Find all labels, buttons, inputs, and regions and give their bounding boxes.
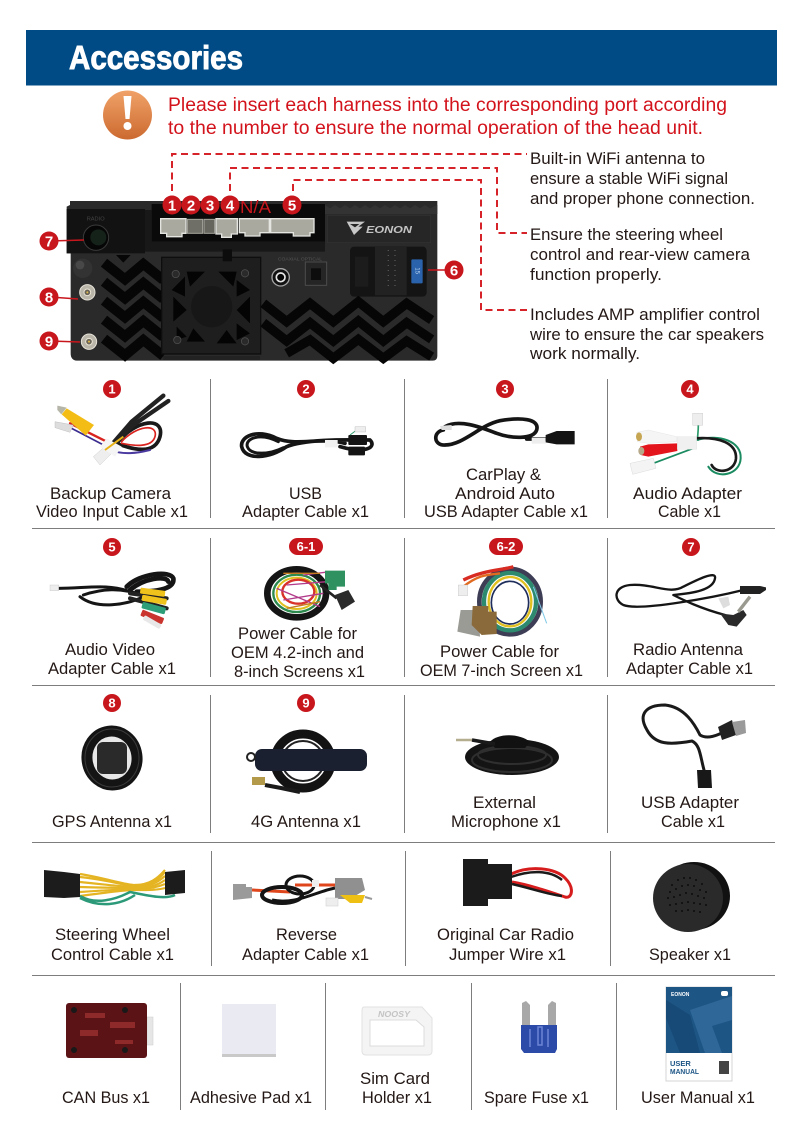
note: AMP control: work normally. [529, 345, 640, 363]
badge 2 [297, 380, 315, 398]
item: audio adapter cable [630, 380, 743, 521]
icon: jumper wire [463, 859, 571, 906]
item: jumper wire [437, 859, 574, 964]
port badges on device: N/A [240, 197, 271, 217]
item: power cable 6-2 [420, 538, 583, 680]
label: Sim Card [360, 1070, 430, 1088]
note: WiFi antenna: Built-in WiFi antenna to [530, 150, 705, 168]
radio port: RADIO [87, 217, 105, 223]
warning text: to the number to ensure the normal operation of the head unit. [168, 118, 703, 139]
label: USB Adapter [641, 794, 740, 812]
label: Jumper Wire x1 [449, 946, 566, 964]
label: Original Car Radio [437, 926, 574, 944]
label: Power Cable for [440, 643, 559, 661]
note: WiFi antenna: and proper phone connection. [530, 190, 755, 208]
logo plate [327, 215, 431, 243]
note: AMP control: wire to ensure the car speakers [529, 326, 764, 344]
label: CarPlay & [466, 466, 541, 484]
item: CAN bus [62, 1003, 153, 1107]
note: WiFi antenna [530, 150, 755, 208]
label [437, 926, 574, 964]
device rear panel photo: EONON [366, 225, 413, 236]
label: Reverse [276, 926, 337, 944]
port badges on device: 6 [450, 262, 458, 280]
note: AMP control [529, 306, 764, 363]
item: adhesive pad [190, 1004, 312, 1107]
label: Cable x1 [658, 503, 721, 521]
label [36, 485, 188, 521]
label: Android Auto [455, 485, 555, 503]
item: audio video cable [48, 538, 176, 678]
icon: fuse [521, 1001, 557, 1053]
connector block [161, 219, 314, 237]
icon: SIM holder: NOOSY [378, 1010, 411, 1019]
badge 1: 1 [108, 382, 116, 396]
label [242, 926, 369, 964]
label: Steering Wheel [55, 926, 170, 944]
label: Speaker x1 [649, 946, 731, 964]
label: CAN Bus x1 [62, 1089, 150, 1107]
item: CarPlay USB cable [424, 380, 588, 521]
coax and optical ports: COAXIAL OPTICAL [278, 257, 322, 263]
note: steering wheel control: function properly. [530, 266, 662, 284]
icon: GPS antenna [83, 728, 141, 788]
note: steering wheel control: Ensure the steering wheel [530, 226, 723, 244]
label: USB [289, 485, 322, 503]
icon: audio adapter cable [630, 413, 741, 474]
label: Radio Antenna [633, 641, 744, 659]
badge 5: 5 [108, 540, 116, 554]
port badges on device: 5 [288, 198, 296, 214]
icon: reverse adapter cable [233, 876, 372, 906]
badge 3: 3 [501, 382, 509, 396]
item: GPS antenna [52, 694, 172, 831]
label: Audio Video [65, 641, 155, 659]
label [641, 794, 740, 831]
item: USB adapter cable [242, 380, 372, 521]
icon: user manual: MANUAL [670, 1067, 699, 1076]
icon: AV cable [50, 574, 173, 629]
icon: CAN bus box [66, 1003, 153, 1058]
port badges on device: 8 [45, 290, 53, 306]
item: power cable 6-1 [231, 538, 365, 681]
note: steering wheel control [530, 226, 751, 284]
item: backup camera cable [36, 380, 188, 521]
port badges on device: 2 [187, 198, 195, 214]
label: Adapter Cable x1 [626, 660, 753, 678]
item: USB adapter [641, 705, 746, 831]
icon: microphone [456, 735, 559, 775]
item: user manual [641, 987, 755, 1107]
icon: user manual: EONON [671, 992, 690, 998]
note: AMP control: Includes AMP amplifier control [530, 306, 760, 324]
label [51, 926, 174, 964]
fuse [411, 259, 423, 283]
label: OEM 4.2-inch and [231, 644, 364, 662]
badge 4 [681, 380, 699, 398]
label: External [473, 794, 536, 812]
badge 7 [682, 538, 700, 556]
icon: power cable harness [457, 567, 547, 637]
label: Adhesive Pad x1 [190, 1089, 312, 1107]
badge 9: 9 [302, 696, 310, 710]
SMA connectors [80, 285, 95, 300]
icon: CarPlay cable [436, 419, 575, 445]
label [360, 1070, 432, 1107]
icon: USB adapter [643, 705, 746, 788]
label: Power Cable for [238, 625, 357, 643]
label: Audio Adapter [633, 485, 743, 503]
item: external microphone [451, 735, 561, 831]
label: Backup Camera [50, 485, 172, 503]
label [424, 466, 588, 521]
icon: USB cable [242, 427, 372, 456]
port badges on device: 9 [45, 334, 53, 350]
port badges on device: 1 [168, 198, 176, 214]
badge 4: 4 [686, 382, 694, 396]
label: Control Cable x1 [51, 946, 174, 964]
icon: power cable harness [267, 569, 355, 617]
label [626, 641, 753, 678]
item: 4G antenna [247, 694, 367, 831]
device rear panel photo [67, 201, 437, 361]
label: Adapter Cable x1 [242, 946, 369, 964]
badge 7: 7 [687, 540, 695, 554]
item: speaker [649, 862, 731, 964]
header banner [26, 30, 777, 86]
label [633, 485, 743, 521]
badge 6-1: 6-1 [297, 539, 315, 554]
note: WiFi antenna: ensure a stable WiFi signal [530, 170, 728, 188]
label [451, 794, 561, 831]
badge 8: 8 [108, 696, 116, 710]
port badges on device: 7 [45, 234, 53, 250]
port badges on device: 4 [226, 198, 235, 214]
icon: radio antenna cable [617, 575, 766, 627]
label: 8-inch Screens x1 [234, 663, 365, 681]
title: Accessories [69, 39, 243, 76]
label: USB Adapter Cable x1 [424, 503, 588, 521]
right connector [350, 247, 427, 297]
label: Adapter Cable x1 [242, 503, 369, 521]
icon: speaker [653, 862, 730, 932]
item: reverse adapter cable [233, 876, 372, 964]
icon: backup camera cable [55, 396, 168, 465]
label: 4G Antenna x1 [251, 813, 361, 831]
dashed leader lines [172, 154, 527, 310]
warning text: Please insert each harness into the corresponding port according [168, 95, 727, 116]
icon: 4G antenna [247, 734, 367, 792]
badge 6-2: 6-2 [497, 539, 515, 554]
badge 2: 2 [302, 382, 310, 396]
port badges on device: 3 [206, 198, 214, 214]
icon: user manual: USER [670, 1059, 691, 1068]
label: Cable x1 [661, 813, 725, 831]
dome button [73, 259, 92, 278]
label: GPS Antenna x1 [52, 813, 172, 831]
device rear panel photo: 15 [414, 267, 420, 275]
grid dividers [32, 379, 775, 1110]
item: radio antenna cable [617, 538, 766, 678]
label: User Manual x1 [641, 1089, 755, 1107]
icon: warning exclamation [103, 90, 152, 140]
icon: steering wheel cable [44, 870, 185, 904]
label [420, 643, 583, 680]
warning text [168, 95, 727, 139]
fan panel [162, 257, 261, 354]
icon: adhesive pad [222, 1004, 276, 1057]
label [231, 625, 365, 681]
label: Video Input Cable x1 [36, 503, 188, 521]
right vent chevrons [263, 302, 432, 358]
badge 6-2 [489, 538, 523, 555]
badge 3 [496, 380, 514, 398]
badge 1 [103, 380, 121, 398]
label: OEM 7-inch Screen x1 [420, 662, 583, 680]
port badges on device [40, 196, 464, 350]
label: Spare Fuse x1 [484, 1089, 589, 1107]
icon: user manual [666, 987, 732, 1081]
label: Holder x1 [362, 1089, 432, 1107]
label [48, 641, 176, 678]
label: Adapter Cable x1 [48, 660, 176, 678]
note: steering wheel control: control and rear-view camera [530, 246, 751, 264]
left vent chevrons [104, 263, 163, 356]
label [242, 485, 369, 521]
badge 6-1 [289, 538, 323, 555]
item: SIM card holder [360, 1007, 432, 1107]
item: spare fuse [484, 1001, 589, 1107]
label: Microphone x1 [451, 813, 561, 831]
item: steering wheel control cable [44, 870, 185, 964]
